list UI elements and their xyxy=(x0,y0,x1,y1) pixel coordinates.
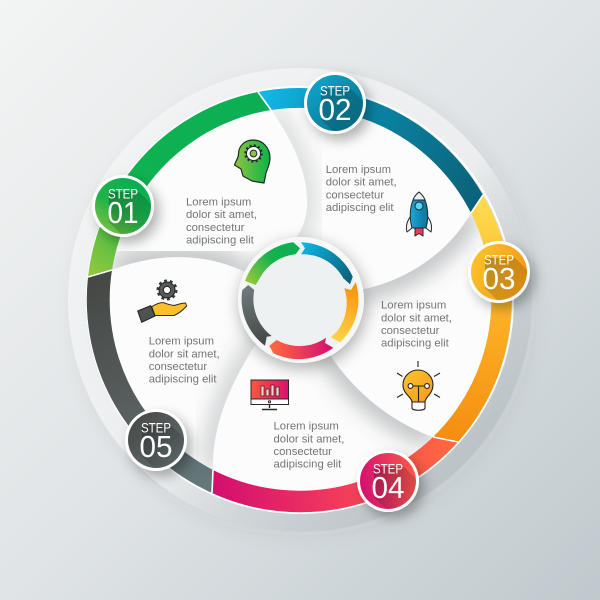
step badge 03: 03 xyxy=(482,261,516,296)
white ring edge xyxy=(87,87,513,513)
hub arrow blue xyxy=(301,242,353,284)
step badge 04: STEP xyxy=(373,460,403,476)
text block 2: adipiscing elit xyxy=(326,202,394,214)
ring segment 2 blue xyxy=(258,88,483,213)
ring segment 3 orange xyxy=(433,195,512,442)
text block 1: Lorem ipsum xyxy=(186,196,251,208)
step badge 05: 05 xyxy=(140,429,172,464)
text block 5 xyxy=(149,336,220,386)
outer translucent disc xyxy=(68,68,532,532)
step badge 04: 04 xyxy=(372,470,404,505)
hub arrow orange xyxy=(331,282,358,342)
text block 5: dolor sit amet, xyxy=(149,348,220,360)
text block 5: Lorem ipsum xyxy=(149,336,214,348)
ring segment dividers xyxy=(88,92,483,493)
text block 4: dolor sit amet, xyxy=(274,433,344,445)
icon: monitor with chart xyxy=(251,380,288,410)
text block 1 xyxy=(186,196,257,247)
step badge 02 xyxy=(304,72,373,141)
icon: hand holding gear xyxy=(138,281,187,322)
text block 5: adipiscing elit xyxy=(149,374,217,386)
text block 2: consectetur xyxy=(326,189,384,201)
text block 1: consectetur xyxy=(186,222,245,234)
text block 3: dolor sit amet, xyxy=(381,312,452,324)
icon: rocket xyxy=(406,192,432,236)
text block 4: consectetur xyxy=(274,446,332,458)
ring segment 1 green xyxy=(88,92,271,277)
step badge 03: STEP xyxy=(484,252,514,268)
text block 2: dolor sit amet, xyxy=(326,177,397,189)
text block 3 xyxy=(381,300,452,350)
ring segment 5 dark xyxy=(87,270,213,493)
inner petals panel xyxy=(106,106,494,494)
text block 1: dolor sit amet, xyxy=(186,209,257,221)
step badge 03 xyxy=(468,241,537,310)
hub arrow pink xyxy=(269,338,333,359)
icon: head with gear xyxy=(234,140,270,183)
text block 2: Lorem ipsum xyxy=(326,164,391,176)
hub arrow dark xyxy=(242,285,272,346)
text block 1: adipiscing elit xyxy=(186,235,255,247)
icon: light bulb xyxy=(397,361,440,410)
text block 3: adipiscing elit xyxy=(381,338,450,350)
hub arrow green xyxy=(245,242,300,285)
step badge 01: 01 xyxy=(108,195,138,230)
ring segment 4 pink xyxy=(212,437,458,512)
text block 5: consectetur xyxy=(149,361,207,373)
text block 4: adipiscing elit xyxy=(274,459,342,471)
step badge 02: STEP xyxy=(320,82,350,98)
text block 4: Lorem ipsum xyxy=(274,421,339,433)
step badge 05: STEP xyxy=(141,420,171,436)
step badge 04 xyxy=(357,450,426,519)
step badge 02: 02 xyxy=(318,92,352,127)
central hub xyxy=(238,237,364,363)
text block 4 xyxy=(274,421,344,471)
step badge 01 xyxy=(92,175,161,244)
text block 3: Lorem ipsum xyxy=(381,300,446,312)
text block 3: consectetur xyxy=(381,325,440,337)
step badge 05 xyxy=(125,409,194,478)
text block 2 xyxy=(326,164,397,214)
step badge 01: STEP xyxy=(108,186,138,202)
